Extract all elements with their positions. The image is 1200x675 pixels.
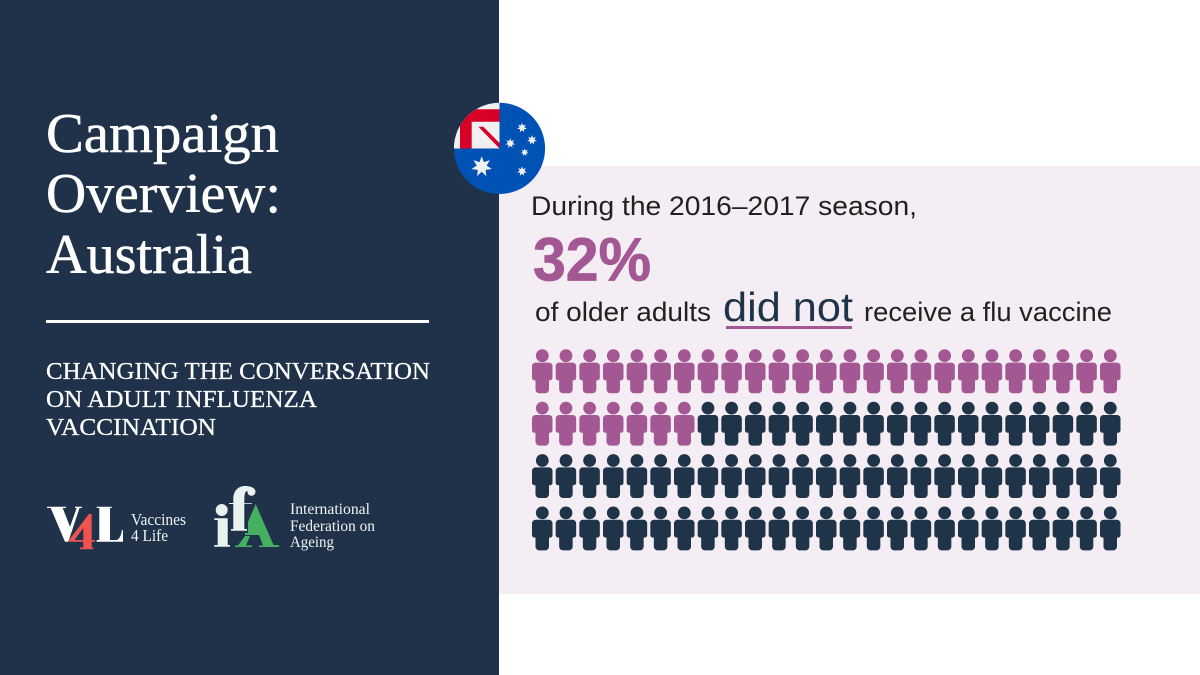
left navy panel	[0, 0, 499, 675]
row 4: 25 navy	[532, 506, 1120, 550]
logo mark: V4L	[47, 507, 123, 549]
text: season intro: During the 2016–2017 season,	[531, 191, 917, 221]
subtitle: CHANGING THE CONVERSATION	[46, 358, 430, 385]
logo: International Federation on Ageing	[214, 486, 375, 551]
flag: red cross	[460, 109, 500, 148]
logo: Vaccines 4 Life	[47, 507, 186, 549]
logo text: International Federation on Ageing: International	[290, 501, 370, 518]
logo text: International Federation on Ageing	[290, 501, 375, 551]
logo text: Vaccines 4 Life	[131, 510, 186, 545]
row 2: 18 navy	[698, 402, 1120, 446]
logo text: Vaccines 4 Life: 4 Life	[131, 526, 168, 545]
icon: Australian flag	[453, 102, 546, 195]
right tinted panel	[499, 166, 1200, 594]
emphasis: did not: did not	[723, 284, 854, 330]
logo text: International Federation on Ageing: Ageing	[290, 534, 334, 551]
subtitle: ON ADULT INFLUENZA	[46, 386, 317, 413]
text: statement: receive a flu vaccine	[864, 297, 1112, 327]
text: statement: of older adults	[535, 297, 711, 327]
title: Campaign	[46, 103, 279, 165]
text: statement	[535, 284, 1112, 330]
flag: stars	[471, 123, 537, 176]
subtitle	[46, 358, 430, 441]
title divider	[46, 320, 429, 323]
title	[46, 103, 281, 286]
logo text: Vaccines 4 Life: Vaccines	[131, 510, 186, 529]
logo text: International Federation on Ageing: Federation on	[290, 518, 375, 535]
logo mark: ifA	[214, 486, 279, 547]
pictogram: people, 32 of 100 highlighted	[532, 349, 1120, 550]
row 1: 25 highlighted	[532, 349, 1120, 393]
subtitle: VACCINATION	[46, 414, 216, 441]
row 2: 7 highlighted	[532, 402, 694, 446]
title: Australia	[46, 224, 252, 286]
row 3: 25 navy	[532, 454, 1120, 498]
title: Overview:	[46, 163, 281, 225]
stat: 32%: 32%	[533, 226, 651, 294]
